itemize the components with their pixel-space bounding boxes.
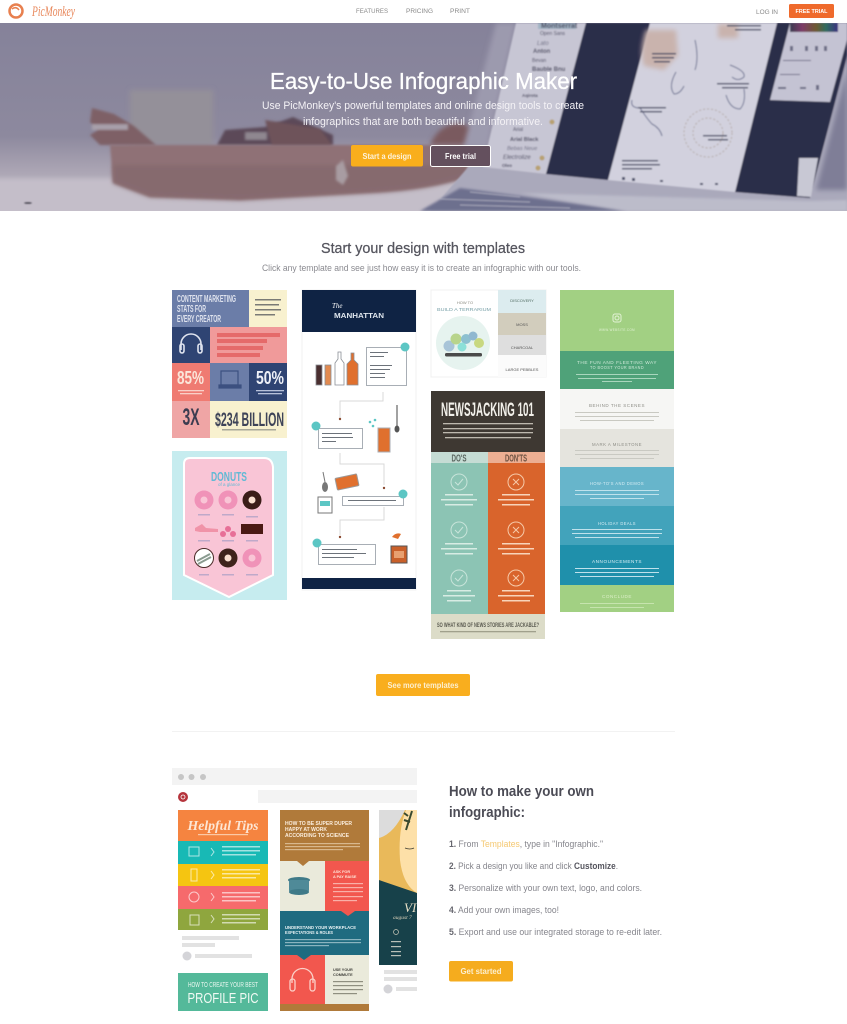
laptop small thumbnail panel (797, 158, 818, 197)
how-to heading: infographic: (449, 805, 525, 821)
free trial button: Free trial (445, 152, 476, 161)
step 5: 5. Export and use our integrated storage to re-edit later. (449, 927, 662, 937)
template: the manhattan: MANHATTAN (334, 311, 384, 320)
manhattan title: The (332, 302, 342, 310)
template: the manhattan (302, 290, 416, 590)
terrarium illustration (436, 316, 490, 370)
card: workplace happiness: A PAY RAISE (333, 875, 357, 879)
donuts title: DONUTS (211, 470, 247, 484)
browser top bar (172, 768, 417, 785)
templates section heading: Start your design with templates (321, 240, 525, 257)
hero photo: laptop (420, 23, 847, 211)
hero description: infographics that are both beautiful and informative. (303, 116, 543, 128)
template: build a terrarium (431, 290, 546, 377)
nav links: PRICING (406, 9, 433, 15)
do's and don'ts headers (452, 454, 527, 464)
stat: 3X: 3X (182, 404, 200, 431)
section labels: MARK A MILESTONE (592, 442, 642, 447)
pink shield (184, 458, 273, 597)
card: workplace happiness: USE YOUR (333, 968, 353, 972)
free trial nav button: FREE TRIAL (796, 9, 828, 15)
template title: CONTENT MARKETING (177, 294, 236, 305)
hero description: Use PicMonkey's powerful templates and online design tools to create (262, 100, 584, 112)
laptop dark panels (546, 23, 650, 180)
laptop sidebar font list: Arial (513, 127, 523, 133)
stat: $234 billion: $234 BILLION (215, 410, 284, 431)
laptop sidebar font list: Bevan (532, 58, 546, 64)
card: workplace happiness: HOW TO BE SUPER DUPER (285, 821, 352, 827)
laptop sidebar font list: Oleo (502, 163, 512, 168)
card: workplace happiness: UNDERSTAND YOUR WORKPLACE (285, 925, 356, 930)
icon: PicMonkey logo (10, 4, 22, 18)
section labels: HOW-TO'S AND DEMOS (590, 481, 644, 486)
do's and don'ts headers: DON'TS (505, 454, 527, 464)
illustration: bottles (316, 352, 358, 385)
template title: STATS FOR (177, 304, 206, 315)
do's check icons (451, 474, 467, 586)
nav links (356, 9, 778, 16)
free trial button (430, 146, 490, 166)
hero banner (0, 23, 847, 228)
start a design button: Start a design (362, 152, 412, 161)
laptop bezel (462, 23, 515, 145)
laptop sidebar font list: Lato (537, 41, 549, 47)
template: content marketing stats (172, 290, 287, 438)
card meta lines (182, 936, 252, 960)
laptop sidebar font list: Electrolize (503, 155, 531, 161)
section labels: ANNOUNCEMENTS (592, 559, 642, 564)
don'ts cross icons (508, 474, 524, 586)
newsjacking title: NEWSJACKING 101 (441, 400, 534, 421)
get started button (449, 961, 513, 982)
section labels: TO BOOST YOUR BRAND (590, 365, 644, 370)
free trial nav button (789, 4, 834, 18)
terrarium layer labels: MOSS (516, 322, 528, 327)
illustration: mixing glass (369, 405, 400, 452)
card: profile pic (178, 973, 268, 1011)
stat: 85%: 85% (177, 368, 204, 388)
card: helpful tips: Helpful Tips (187, 819, 259, 834)
laptop sidebar font list: Open Sans (540, 31, 566, 37)
terrarium layer labels: DISCOVERY (510, 298, 534, 303)
section labels: WWW.WEBSITE.COM (599, 328, 635, 332)
section labels: THE FUN AND FLEETING WAY (577, 360, 657, 365)
get started button: Get started (460, 967, 502, 976)
card: vintage portrait poster: VI (404, 900, 417, 915)
stat: 50%: 50% (256, 368, 284, 388)
card: workplace happiness: ACCORDING TO SCIENCE (285, 833, 350, 839)
do's and don'ts headers: DO'S (452, 454, 467, 464)
start a design button (351, 145, 423, 166)
laptop sidebar font list: Montserrat (541, 23, 578, 30)
card: profile pic: PROFILE PIC (188, 990, 259, 1007)
card: vintage portrait poster: august 7 (393, 915, 412, 921)
step boxes (318, 348, 406, 564)
section labels: HOLIDAY DEALS (598, 521, 636, 526)
icon: pinterest (178, 792, 188, 802)
hero description (262, 100, 584, 128)
card: workplace happiness: HAPPY AT WORK (285, 827, 327, 833)
flow connectors (340, 392, 384, 535)
how-to heading: How to make your own (449, 784, 594, 800)
card: workplace happiness: EXPECTATIONS & ROLES (285, 930, 333, 935)
donut grid (194, 490, 263, 576)
section labels: CONCLUDE (602, 594, 632, 599)
illustration: strainer and pour (318, 472, 359, 513)
templates section subheading: Click any template and see just how easy it is to create an infographic with our tools. (262, 263, 581, 274)
laptop keyboard and base (420, 188, 627, 211)
terrarium layer labels: LARGE PEBBLES (506, 367, 539, 372)
template title: EVERY CREATOR (177, 314, 221, 325)
laptop sidebar font list: Bebas Neue (507, 146, 537, 152)
hero title: Easy-to-Use Infographic Maker (270, 68, 577, 94)
section labels: BEHIND THE SCENES (589, 403, 645, 408)
nav links: PRINT (450, 9, 470, 15)
template: donuts (172, 451, 287, 600)
laptop sidebar font list: Bauble Bnu (532, 67, 566, 73)
section labels (577, 328, 657, 599)
template: build a terrarium: BUILD A TERRARIUM (437, 307, 491, 312)
browser mockup of templates (172, 768, 418, 1011)
terrarium layer labels (506, 298, 539, 372)
template: newsjacking 101 (431, 391, 545, 639)
terrarium title: HOW TO (457, 300, 473, 305)
see more templates button (376, 674, 470, 696)
card: vintage portrait poster (379, 810, 417, 965)
step number badges (312, 342, 410, 548)
card: workplace happiness (280, 810, 369, 1011)
card: profile pic: HOW TO CREATE YOUR BEST (188, 982, 259, 989)
step 2: 2. Pick a design you like and click Customize. (449, 861, 618, 871)
nav links: LOG IN (756, 10, 778, 16)
icon: headphones (290, 968, 315, 991)
nav links: FEATURES (356, 9, 388, 15)
card: workplace happiness: COMMUTE (333, 973, 353, 977)
laptop sidebar font list: Anton (533, 49, 551, 55)
icon: instagram (613, 314, 621, 322)
template title (177, 294, 236, 325)
logo wordmark: PicMonkey (31, 4, 75, 20)
see more templates button: See more templates (388, 681, 459, 690)
laptop sidebar (483, 23, 586, 174)
laptop white template page (608, 23, 777, 192)
laptop sidebar font list: Aqirota (522, 93, 538, 98)
step 4: 4. Add your own images, too! (449, 905, 559, 915)
card: helpful tips (178, 810, 268, 930)
newsjacking footer question: SO WHAT KIND OF NEWS STORIES ARE JACKABLE? (437, 622, 539, 629)
icon: headphones (180, 334, 202, 353)
card meta lines (384, 970, 417, 994)
illustration: garnished glass (391, 533, 407, 563)
terrarium layer labels: CHARCOAL (511, 345, 534, 350)
hero photo: table and bowl (0, 92, 471, 208)
step 3: 3. Personalize with your own text, logo, and colors. (449, 883, 642, 893)
card: workplace happiness: ASK FOR (333, 870, 350, 874)
laptop sidebar font list (502, 23, 578, 168)
how-to heading (449, 784, 594, 821)
template: instagram stories (560, 290, 674, 612)
top navigation bar (0, 0, 847, 23)
how-to steps (449, 839, 662, 937)
step 1: 1. From Templates, type in "Infographic." (449, 839, 603, 849)
icon: laptop (219, 371, 241, 388)
laptop right tool panel (770, 23, 847, 102)
template: donuts: of a glance (218, 482, 240, 487)
laptop sidebar font list: Arial Black (510, 137, 539, 143)
